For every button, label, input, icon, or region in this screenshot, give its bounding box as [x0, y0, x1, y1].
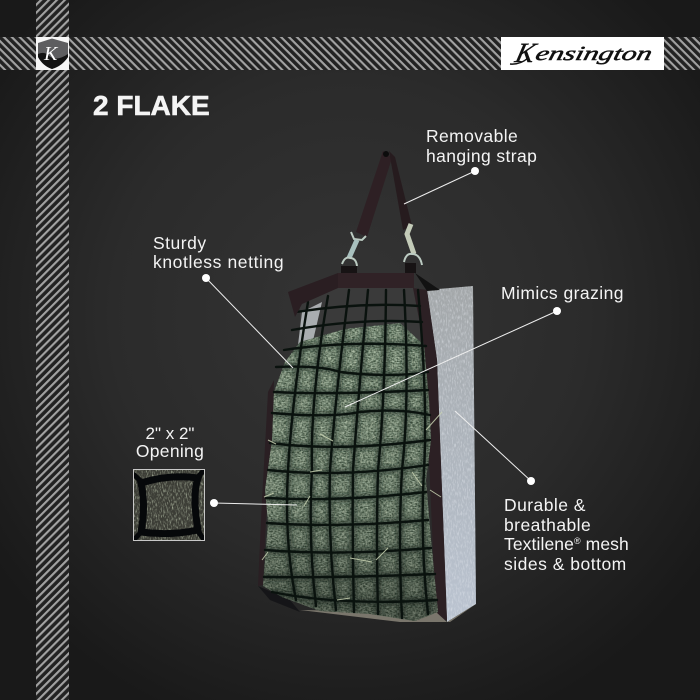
hay highlight strands — [262, 412, 442, 600]
callout: 2 x 2 opening inset: Opening — [136, 441, 204, 461]
callout: mimics grazing: Mimics grazing — [501, 283, 624, 303]
callout: sturdy knotless netting: knotless netting — [153, 252, 284, 272]
callout: textilene mesh: breathable — [504, 515, 591, 535]
logo: Kensington wordmark: ensington — [533, 43, 655, 65]
callout: textilene mesh: Durable & — [504, 495, 586, 515]
callout: 2 x 2 opening inset: 2" x 2" — [146, 424, 194, 443]
callout: sturdy knotless netting: Sturdy — [153, 233, 207, 253]
logo: Kensington wordmark: K — [511, 38, 541, 69]
icon: shield K logo: K — [43, 43, 59, 65]
bottom lining — [300, 604, 476, 622]
callout: textilene mesh: sides & bottom — [504, 554, 627, 574]
left side binding — [258, 380, 274, 586]
callout: removable hanging strap: hanging strap — [426, 146, 537, 166]
inset photo — [133, 469, 205, 541]
top fabric binding — [288, 263, 416, 317]
callout: removable hanging strap — [404, 126, 537, 204]
callout: sturdy knotless netting — [153, 233, 293, 368]
callout: textilene mesh: ® — [574, 536, 581, 546]
hay — [263, 323, 438, 621]
logo: Kensington wordmark — [501, 37, 664, 70]
net lines — [264, 290, 437, 618]
callout: textilene mesh: Textilene — [504, 534, 574, 554]
right side mesh panel — [413, 273, 480, 625]
callout: mimics grazing — [345, 283, 624, 407]
striped horizontal band — [0, 37, 700, 70]
net backing, dark interior — [300, 288, 424, 345]
callout: removable hanging strap: Removable — [426, 126, 518, 146]
striped vertical band — [36, 0, 69, 700]
hay bag product photo — [255, 151, 480, 630]
callout: 2 x 2 opening inset — [133, 424, 297, 541]
callout: textilene mesh: mesh — [581, 534, 629, 554]
metal snap clips — [342, 224, 422, 266]
hanging strap — [356, 151, 412, 237]
title: 2 FLAKE — [93, 90, 210, 121]
callout: textilene mesh — [455, 411, 629, 574]
icon: shield K logo — [36, 37, 69, 70]
